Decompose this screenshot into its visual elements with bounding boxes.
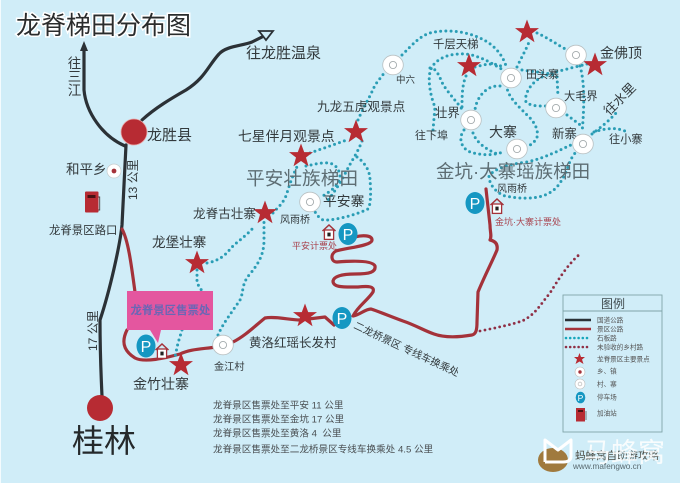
label: Erlongqiao transfer: 二龙桥景区 专线车换乘处: [352, 319, 461, 379]
watermark: brown emblem: [538, 448, 568, 472]
legend: scenic spot: 龙脊景区主要景点: [597, 354, 650, 364]
label: Heping: 和平乡: [66, 162, 106, 177]
label: scenic junction: 龙脊景区路口: [49, 223, 117, 237]
distance: Huangluo: 龙脊景区售票处至黄洛 4 公里: [213, 428, 342, 440]
town: Longsheng: [121, 119, 147, 145]
label: Qianceng: 千层天梯: [433, 38, 479, 51]
star: Qixing: [289, 144, 313, 166]
distance: Erlongqiao: 龙脊景区售票处至二龙桥景区专线车换乘处 4.5 公里: [213, 444, 434, 456]
parking: Ping'an: P: [343, 227, 353, 244]
legend: village: 村、寨: [597, 380, 617, 388]
label: Longbao: 龙堡壮寨: [152, 234, 207, 250]
label: Ping'an ticket: 平安计票处: [292, 240, 337, 251]
road: to Longsheng hot spring: [142, 37, 262, 120]
label: Jinjiang: 金江村: [214, 360, 245, 373]
village: near Jinfoding: [566, 45, 586, 65]
label: 17 km: 17 公里: [86, 310, 100, 351]
road labels: [66, 45, 321, 351]
label: ancient Zhuang village: 龙脊古壮寨: [193, 206, 256, 221]
parking: Erlongqiao: P: [337, 311, 347, 328]
parking: Jinkeng: P: [470, 196, 480, 213]
village: Xinzhai: [573, 134, 593, 154]
label: Jinzhu: 金竹壮寨: [133, 376, 189, 392]
distance: Jinkeng: 龙脊景区售票处至金坑 17 公里: [213, 414, 345, 426]
label: Zhuangjie: 壮界: [435, 106, 460, 120]
road: Ping'an serpentine: [332, 189, 497, 337]
village: Jinjiang: [213, 335, 233, 355]
star: north summit: [515, 20, 539, 42]
label: to Xiaozhai: 往小寨: [609, 132, 643, 146]
watermark: white logo: [545, 440, 571, 462]
label: Jiulong viewpoint: 九龙五虎观景点: [317, 100, 405, 114]
label: Dazhai: 大寨: [489, 124, 517, 140]
village: Damaojie: [546, 98, 566, 118]
label: Huangluo: 黄洛红瑶长发村: [249, 335, 337, 350]
watermark: small slogan: 蚂蜂窝自助游攻略: [575, 449, 659, 462]
legend: parking: [576, 392, 617, 403]
scenic spot stars: [169, 20, 607, 375]
parking: Ping'an: [338, 223, 358, 245]
distance list: [213, 400, 434, 456]
road: scenic road north: [122, 229, 135, 292]
watermark: url: www.mafengwo.cn: [572, 462, 642, 471]
star: Qianceng: [457, 54, 481, 76]
road: scenic road to Jinjiang: [124, 330, 216, 360]
label: to Sanjiang: 往三江: [66, 56, 81, 97]
legend: town: 乡、镇: [597, 366, 617, 376]
icon: Ping'an ticket house: [322, 225, 336, 239]
label: Guilin: 桂林: [72, 423, 136, 459]
legend: stone path: 石板路: [597, 334, 617, 342]
label: Damaojie: 大毛界: [564, 89, 598, 103]
village: Zhongliu: [383, 55, 403, 75]
legend: scenic road: 景区公路: [597, 324, 624, 334]
watermark: [538, 438, 665, 472]
label: Qixing viewpoint: 七星伴月观景点: [238, 129, 335, 144]
path: Jinkeng terraces: [402, 31, 507, 69]
stone paths: [175, 31, 627, 357]
arrow: to Sanjiang: [80, 41, 88, 51]
village: Dazhai: [507, 139, 527, 159]
road: to Sanjiang: [84, 50, 125, 146]
icon: Jinkeng ticket house: [490, 199, 504, 213]
legend: petrol: 加油站: [597, 408, 617, 418]
heading: Jinkeng terraces: 金坑·大寨瑶族梯田: [436, 161, 590, 182]
village: Ping'an: [300, 192, 320, 212]
town marker: Heping: [107, 164, 121, 178]
road: Longsheng to Guilin: [100, 145, 126, 396]
star: Jiulong: [344, 120, 368, 142]
icon: main ticket house: [156, 344, 168, 358]
parking: Jinkeng: [466, 192, 484, 214]
arrow: to hot spring: [259, 31, 273, 40]
label: hot spring: 往龙胜温泉: [246, 45, 321, 62]
national roads: [80, 31, 273, 396]
label: Jinkeng bridge: 风雨桥: [497, 183, 527, 195]
label: Ping'an village: 平安寨: [323, 193, 365, 209]
label: Xinzhai: 新寨: [552, 126, 577, 141]
place labels: [49, 38, 643, 459]
legend: parking: P: [578, 393, 584, 403]
label: Longsheng: 龙胜县: [147, 127, 192, 144]
label: Jinkeng ticket: 金坑·大寨计票处: [495, 216, 561, 227]
legend: village road: 未验收的乡村路: [597, 342, 644, 352]
label: Jinfoding: 金佛顶: [600, 45, 642, 61]
label: to Xiabu: 往下埠: [415, 128, 448, 142]
parking: Erlongqiao: [332, 307, 352, 329]
village markers: [213, 45, 593, 355]
road: unpaved village road: [480, 254, 580, 331]
path: Ping'an terraces: [207, 227, 254, 263]
star: Jinfoding: [583, 52, 607, 75]
label: 13 km: 13 公里: [126, 159, 140, 200]
road: Jinjiang to Ping'an: [233, 317, 334, 342]
parking: ticket office: [136, 334, 156, 358]
callout: ticket office: 龙脊景区售票处: [130, 303, 211, 317]
callout: ticket office: [127, 291, 213, 343]
title: 龙脊梯田分布图: [16, 12, 191, 40]
left edge strip: [0, 0, 1, 483]
heading: Ping'an terraces: 平安壮族梯田: [246, 168, 358, 189]
parking and ticket offices: [136, 192, 504, 358]
star: ancient Zhuang village: [253, 200, 277, 223]
village: Tiantou: [501, 68, 521, 88]
label: Zhongliu: 中六: [396, 74, 416, 86]
star: Jinzhu: [169, 352, 193, 375]
icon: petrol station: [85, 192, 100, 212]
legend: national road: 国道公路: [597, 316, 624, 324]
label: Tiantou: 田头寨: [526, 67, 559, 81]
legend: parking: 停车场: [597, 392, 617, 402]
distance: Ping'an: 龙脊景区售票处至平安 11 公里: [213, 400, 344, 412]
legend: [563, 295, 662, 432]
watermark: brand: 马蜂窝: [584, 438, 665, 468]
town: Guilin: [87, 395, 113, 421]
label: wind-rain bridge: 风雨桥: [280, 214, 310, 226]
village: Zhuangjie: [461, 110, 481, 130]
scenic area roads: [122, 189, 580, 360]
star: Longbao: [185, 250, 209, 273]
star: Huangluo: [293, 304, 317, 326]
label: to Shuili: 往水里: [601, 80, 639, 118]
legend heading: 图例: [601, 297, 625, 311]
parking: ticket office: P: [141, 339, 151, 356]
